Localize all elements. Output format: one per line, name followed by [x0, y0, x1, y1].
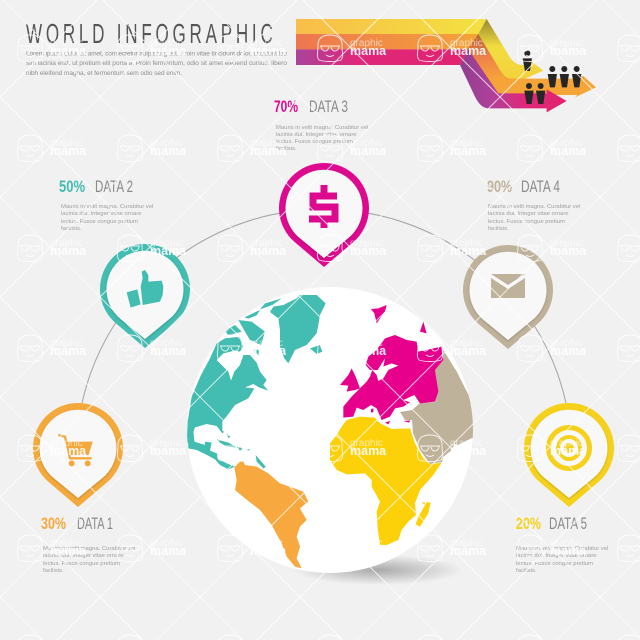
- globe shadow: [293, 555, 463, 585]
- label: data 1: DATA 1: [77, 515, 113, 533]
- pin: data 5: [524, 403, 614, 507]
- icon: dollar sign: [309, 185, 337, 228]
- label: data 2: [59, 178, 153, 232]
- ribbon: magenta arrow: [296, 49, 567, 112]
- label: data 3: DATA 3: [309, 98, 348, 116]
- label: data 4: 90%: [487, 178, 512, 196]
- pin: data 4: [463, 245, 553, 349]
- intro text block: nibh eleifend magna, et fermentum sem odio sed enim.: [26, 70, 182, 77]
- label: data 4: lacinia dui. Integer vitae ornare: [488, 211, 569, 217]
- label: data 3: lacinia dui. Integer vitae ornare: [276, 132, 357, 138]
- continent: North America: [187, 295, 326, 469]
- label: data 3: Mauris in velit magna. Curabitur vel: [276, 125, 368, 131]
- icon: thumbs up: [127, 270, 163, 308]
- label: data 1: facilisis.: [43, 568, 64, 574]
- continent: South America: [234, 462, 308, 568]
- label: data 3: 70%: [274, 98, 298, 116]
- icon: shopping cart: [58, 435, 93, 466]
- label: data 2: DATA 2: [95, 178, 133, 196]
- icon: target: [548, 428, 590, 468]
- intro text block: Lorem ipsum dolor sit amet, consectetur adipiscing elit. Proin vitae tincidunt dolor, tincidunt leo: [26, 50, 287, 58]
- label: data 3: facilisis.: [276, 146, 297, 152]
- label: data 4: facilisis.: [488, 226, 509, 232]
- ribbon: yellow arrow: [296, 19, 543, 88]
- label: data 5: [516, 515, 608, 574]
- continent: Africa: [330, 417, 442, 545]
- intro text block: sim lacinia erat, ut pretium elit porta a. Proin fermentum, odio sit amet eleifend cursus, libero: [26, 60, 287, 67]
- label: data 1: Mauris in velit magna. Curabitur vel: [43, 546, 135, 552]
- label: data 2: facilisis.: [61, 226, 82, 232]
- label: data 2: lectus. Fusce congue pretium: [61, 219, 138, 225]
- label: data 1: lacinia dui. Integer vitae ornare: [43, 553, 124, 559]
- label: data 3: [274, 98, 368, 152]
- label: data 5: lacinia dui. Integer vitae ornare: [516, 553, 597, 559]
- ribbon: orange arrow: [296, 34, 596, 97]
- pin: data 1: [33, 403, 123, 507]
- connecting arc: [82, 209, 566, 403]
- label: data 4: DATA 4: [521, 178, 560, 196]
- ribbon arrows with people: [296, 19, 596, 112]
- continent: Asia: [400, 348, 480, 464]
- label: data 4: [487, 178, 580, 232]
- label: data 2: 50%: [59, 178, 85, 196]
- label: data 5: Mauris in velit magna. Curabitur vel: [516, 546, 608, 552]
- continent: Europe: [340, 305, 443, 424]
- people icons: [523, 50, 581, 104]
- label: data 2: lacinia dui. Integer vitae ornare: [61, 211, 142, 217]
- pin: data 2: [100, 244, 190, 348]
- label: data 1: [41, 515, 135, 574]
- label: data 2: Mauris in velit magna. Curabitur vel: [61, 204, 153, 210]
- icon: envelope: [491, 274, 525, 298]
- label: data 1: lectus. Fusce congue pretium: [43, 561, 120, 567]
- globe: [187, 287, 480, 573]
- label: data 5: facilisis.: [516, 568, 537, 574]
- title: WORLD INFOGRAPHIC: [26, 18, 273, 49]
- label: data 3: lectus. Fusce congue pretium: [276, 139, 353, 145]
- label: data 5: 20%: [516, 515, 541, 533]
- label: data 5: lectus. Fusce congue pretium: [516, 561, 593, 567]
- label: data 1: 30%: [41, 515, 66, 533]
- label: data 4: Mauris in velit magna. Curabitur vel: [488, 204, 580, 210]
- intro text block: [26, 50, 287, 77]
- label: data 5: DATA 5: [549, 515, 587, 533]
- label: data 4: lectus. Fusce congue pretium: [488, 219, 565, 225]
- pin: data 3: [279, 163, 369, 267]
